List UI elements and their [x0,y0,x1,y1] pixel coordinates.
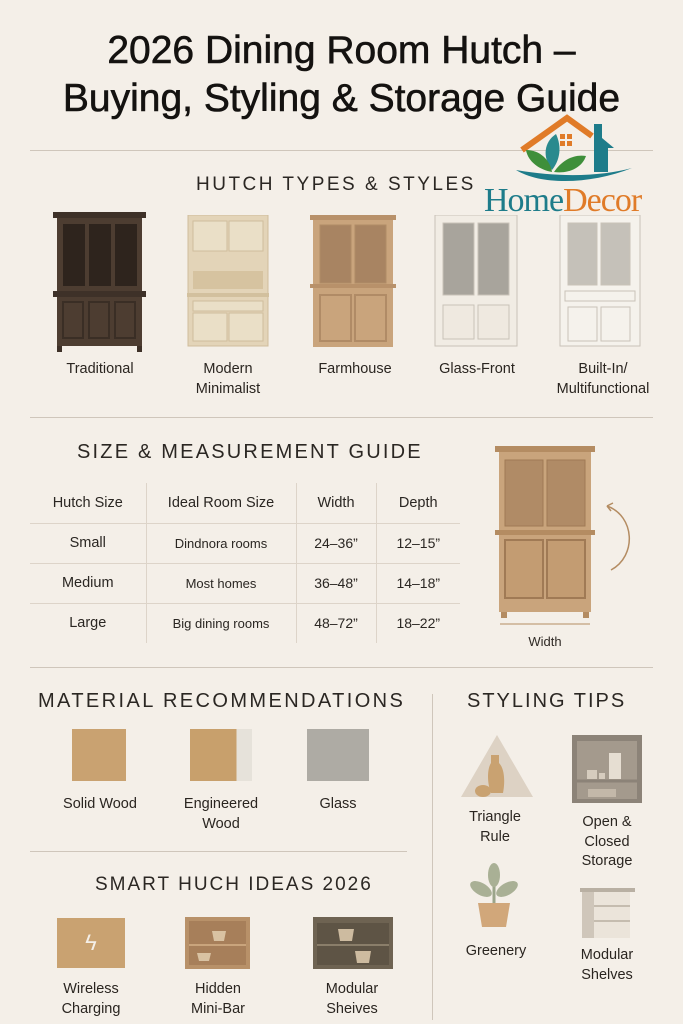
size table: 36–48” [314,575,358,591]
size table: 18–22” [396,615,440,631]
hutch diagram with width: Width [528,634,562,649]
heading: smart ideas: SMART HUCH IDEAS 2026 [95,874,373,895]
labels: triangle / storage [469,809,521,844]
text: Open & [582,814,632,830]
label: modular shelves [581,947,633,982]
text: Built-In/ [578,361,628,377]
size table: Large [69,615,106,631]
text: Multifunctional [557,380,649,396]
icon: triangle [461,735,533,797]
size table: 14–18” [396,575,440,591]
heading: materials: MATERIAL RECOMMENDATIONS [38,690,405,712]
hutch: modern [187,215,269,346]
title: Buying, Styling & Storage Guide [63,77,620,120]
heading: styling tips: STYLING TIPS [467,690,626,712]
swatch: engineered wood [190,729,252,781]
text: Storage [582,853,632,869]
text: Modern [203,361,253,377]
size table: Hutch Size [53,495,123,511]
labels: hutch types: Traditional [66,361,134,377]
icon: plant [470,863,518,927]
icon: open closed storage [572,735,642,803]
text: Sheives [326,1000,378,1016]
labels: smart ideas: Charging [62,1000,120,1016]
hutch: farmhouse [310,215,396,347]
text: Engineered [184,796,258,812]
labels: smart ideas: Wireless [63,981,119,997]
size table: Most homes [186,576,256,590]
size table: 48–72” [314,615,358,631]
size table: Ideal Room Size [168,495,274,511]
labels: triangle / storage: Rule [480,828,510,844]
text: Closed [584,834,630,850]
title [63,29,620,120]
hutch: built-in [560,215,640,346]
icon: modular shelves [580,888,635,938]
labels: materials: Solid Wood [63,796,137,812]
hutch: traditional [53,212,146,352]
size table: Small [70,535,106,551]
logo [484,114,642,219]
logo: HomeDecor [484,182,641,219]
heading: size guide: SIZE & MEASUREMENT GUIDE [77,441,423,463]
swatch: solid wood [72,729,126,781]
size table: Width [317,495,355,511]
icon: wireless charging: ϟ [85,930,97,955]
size table: 24–36” [314,535,358,551]
icon: mini-bar [185,917,250,969]
text: Glass [319,796,357,812]
icon: wireless charging [57,918,125,968]
size table: 12–15” [396,535,440,551]
label: greenery: Greenery [466,943,526,959]
size table: Medium [62,575,114,591]
text: Modular [326,981,378,997]
label: modular shelves: Shelves [581,966,633,982]
heading: hutch types: HUTCH TYPES & STYLES [196,174,476,195]
title: 2026 Dining Room Hutch – [107,29,576,72]
hutch: glass-front [434,215,518,346]
size table: Big dining rooms [173,616,269,631]
labels: triangle / storage: Triangle [469,809,521,825]
icon: modular sheives [313,917,393,969]
labels: smart ideas [62,981,120,1016]
size table [30,483,460,643]
label: modular shelves: Modular [581,947,633,963]
text: Mini-Bar [191,1000,245,1016]
size table: Depth [399,495,438,511]
text: Wood [202,816,240,832]
size table: Dindnora rooms [175,536,267,550]
text: Farmhouse [318,361,392,377]
text: Minimalist [196,380,260,396]
text: Glass-Front [439,361,515,377]
hutch diagram with width [495,446,630,649]
swatch: glass [307,729,369,781]
text: Hidden [195,981,241,997]
